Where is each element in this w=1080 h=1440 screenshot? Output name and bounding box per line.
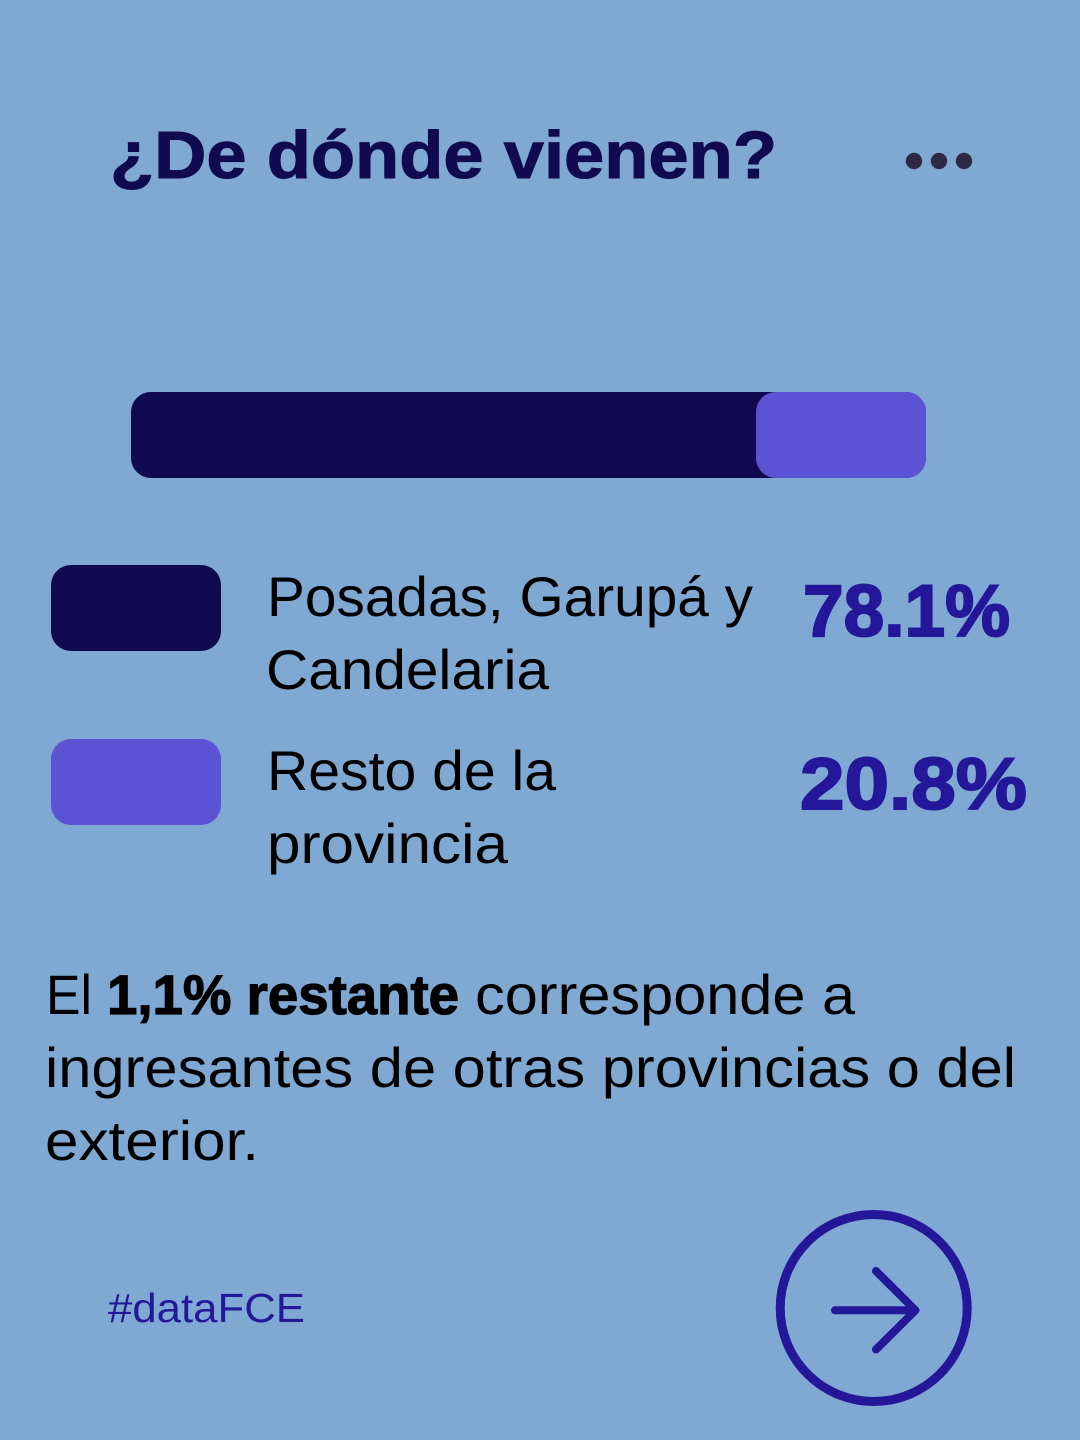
note text block: exterior. <box>45 1109 259 1172</box>
note text block: El <box>46 963 92 1026</box>
hashtag: #dataFCE <box>108 1285 305 1331</box>
note text block: corresponde a <box>475 963 856 1026</box>
legend label: Resto de la provincia <box>267 739 557 875</box>
legend swatch: Resto de la provincia <box>51 739 221 825</box>
note text block <box>45 963 1016 1172</box>
value: 20.8%: 20.8% <box>800 744 1027 825</box>
legend label: Posadas, Garupá y Candelaria: Posadas, Garupá y <box>267 565 753 628</box>
value: 78.1%: 78.1% <box>803 571 1010 652</box>
stacked bar chart <box>131 392 926 478</box>
legend label: Posadas, Garupá y Candelaria: Candelaria <box>266 638 550 701</box>
icon: three dots menu <box>906 153 972 169</box>
icon: arrow in circle <box>780 1214 967 1402</box>
legend label: Resto de la provincia: provincia <box>267 812 509 875</box>
legend label: Resto de la provincia: Resto de la <box>267 739 557 802</box>
note text block: 1,1% restante <box>107 963 459 1026</box>
note text block: ingresantes de otras provincias o del <box>45 1036 1016 1099</box>
title: ¿De dónde vienen? <box>110 118 777 193</box>
legend swatch: Posadas, Garupá y Candelaria <box>51 565 221 651</box>
legend label: Posadas, Garupá y Candelaria <box>266 565 753 701</box>
